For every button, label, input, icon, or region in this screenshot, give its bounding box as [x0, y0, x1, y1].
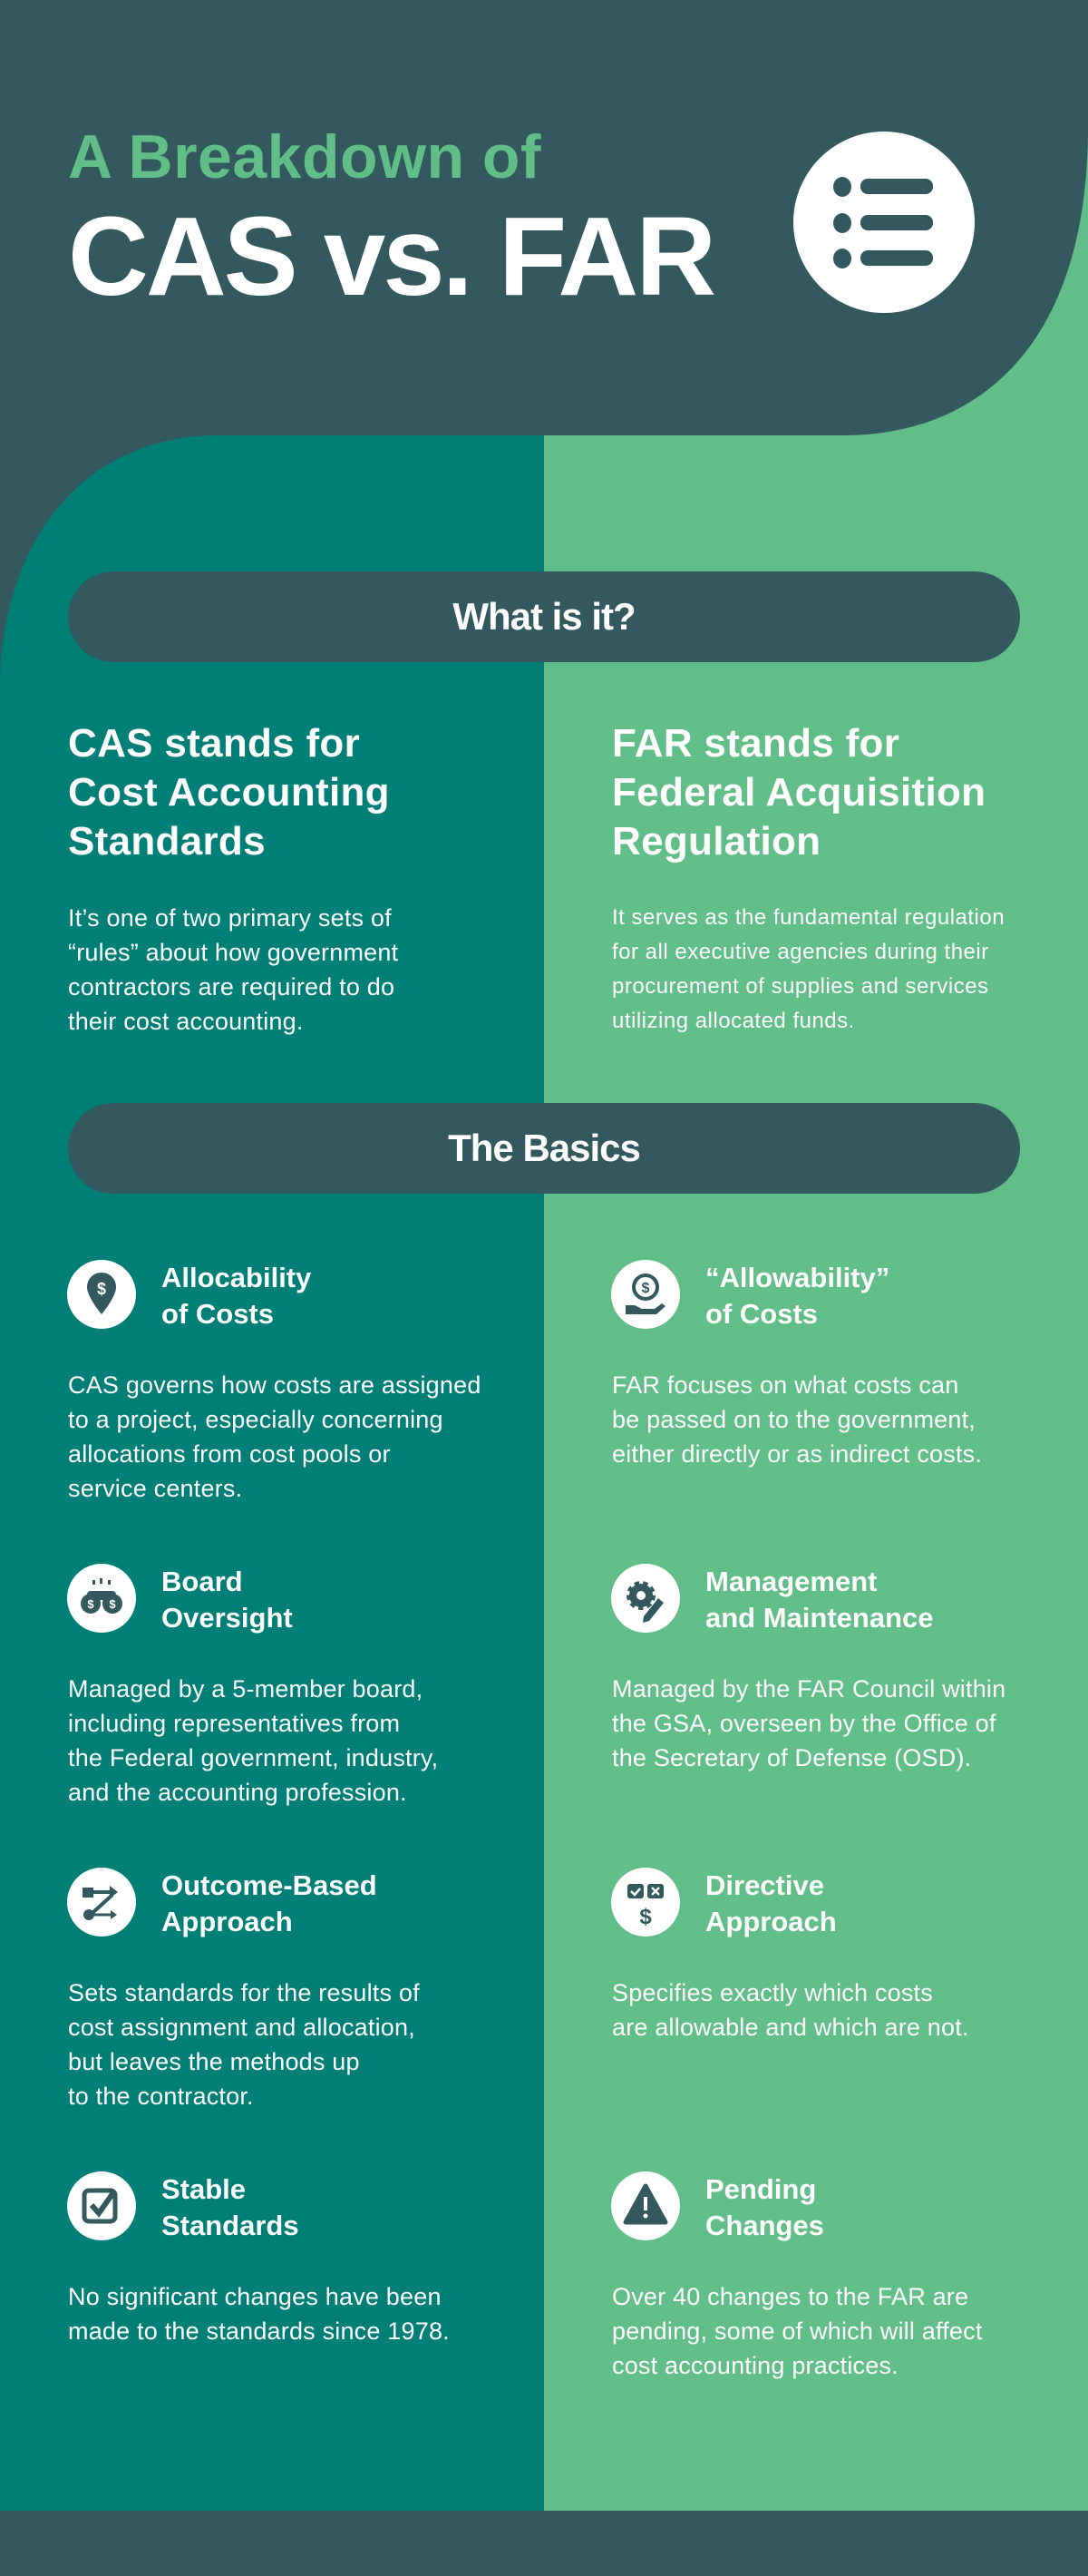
body: pending, some of which will affect [612, 2317, 983, 2345]
heading: Stable [161, 2173, 246, 2205]
heading [705, 1566, 934, 1634]
heading: Approach [161, 1906, 293, 1937]
body: Managed by the FAR Council within [612, 1675, 1005, 1703]
heading [705, 2173, 824, 2241]
body: and the accounting profession. [68, 1779, 407, 1806]
body [68, 2283, 450, 2345]
heading [161, 1566, 293, 1634]
item: Stable Standards [67, 2171, 450, 2345]
pill: The Basics [68, 1103, 1020, 1194]
text: CAS description: It’s one of two primary sets of [68, 904, 392, 932]
icon: binoculars [67, 1564, 136, 1633]
icon: location dollar: $ [97, 1280, 106, 1298]
body: No significant changes have been [68, 2283, 442, 2310]
body: cost assignment and allocation, [68, 2014, 415, 2041]
body: Managed by a 5-member board, [68, 1675, 423, 1703]
heading: of Costs [161, 1298, 274, 1330]
text: FAR description: It serves as the fundamental regulation [612, 905, 1005, 930]
heading [705, 1869, 837, 1937]
footer bar [0, 2511, 1088, 2576]
heading: “Allowability” [705, 1262, 889, 1293]
body: service centers. [68, 1475, 242, 1502]
item: Allowability of Costs [611, 1260, 982, 1468]
heading: Approach [705, 1906, 837, 1937]
item: Directive Approach [611, 1868, 969, 2041]
body: but leaves the methods up [68, 2048, 360, 2075]
icon: check/cross dollar [611, 1868, 680, 1937]
heading: Changes [705, 2210, 824, 2241]
heading [161, 2173, 299, 2241]
icon: binoculars: $ [87, 1597, 94, 1611]
heading [705, 1262, 889, 1330]
title: CAS vs. FAR [68, 195, 714, 319]
item: Board Oversight [67, 1564, 438, 1806]
icon: location dollar [67, 1260, 136, 1329]
body [68, 1371, 481, 1502]
body [612, 1979, 969, 2041]
heading: FAR stands for: FAR stands for [612, 721, 899, 766]
icon: warning [611, 2171, 680, 2240]
text: CAS description [68, 904, 398, 1035]
text: FAR description: procurement of supplies and services [612, 974, 989, 999]
heading: CAS stands for: Cost Accounting [68, 770, 390, 815]
body: CAS governs how costs are assigned [68, 1371, 481, 1399]
body: to a project, especially concerning [68, 1406, 443, 1433]
heading: and Maintenance [705, 1602, 934, 1634]
text: FAR description [612, 905, 1005, 1033]
pill: The Basics: The Basics [448, 1127, 640, 1169]
text: CAS description: “rules” about how government [68, 939, 398, 966]
heading: FAR stands for [612, 721, 986, 864]
heading [161, 1262, 312, 1330]
item: Management and Maintenance [611, 1564, 1005, 1771]
body [68, 1675, 438, 1806]
pill: What is it? [68, 571, 1020, 662]
header shape [0, 0, 1088, 679]
title [68, 122, 714, 319]
heading: of Costs [705, 1298, 818, 1330]
item: Pending Changes [611, 2171, 983, 2379]
icon: hand dollar [611, 1260, 680, 1329]
text: FAR description: utilizing allocated funds. [612, 1009, 855, 1033]
body [68, 1979, 420, 2110]
heading: Oversight [161, 1602, 293, 1634]
heading [161, 1869, 377, 1937]
heading: CAS stands for [68, 721, 390, 864]
heading: Standards [161, 2210, 299, 2241]
heading: CAS stands for: Standards [68, 819, 266, 864]
heading: FAR stands for: Federal Acquisition [612, 770, 986, 815]
body [612, 1675, 1005, 1771]
icon: gear pencil [611, 1564, 680, 1633]
text: FAR description: for all executive agencies during their [612, 940, 989, 964]
heading: FAR stands for: Regulation [612, 819, 821, 864]
item: Allocability of Costs [67, 1260, 481, 1502]
body: to the contractor. [68, 2083, 254, 2110]
body: Sets standards for the results of [68, 1979, 420, 2006]
body: including representatives from [68, 1710, 400, 1737]
body: allocations from cost pools or [68, 1440, 391, 1468]
body: the Federal government, industry, [68, 1744, 438, 1771]
body: either directly or as indirect costs. [612, 1440, 982, 1468]
heading: Allocability [161, 1262, 311, 1293]
title: A Breakdown of [68, 122, 541, 191]
body: made to the standards since 1978. [68, 2317, 450, 2345]
icon: hand dollar: $ [642, 1281, 650, 1296]
body: the GSA, overseen by the Office of [612, 1710, 996, 1737]
item: Outcome-Based Approach [67, 1868, 420, 2110]
body: be passed on to the government, [612, 1406, 976, 1433]
heading: Outcome-Based [161, 1869, 377, 1901]
icon: binoculars: $ [109, 1597, 116, 1611]
body: the Secretary of Defense (OSD). [612, 1744, 971, 1771]
icon: flow arrows [67, 1868, 136, 1937]
body: Specifies exactly which costs [612, 1979, 933, 2006]
icon: check/cross dollar: $ [639, 1905, 652, 1929]
icon: list [793, 132, 975, 313]
body: FAR focuses on what costs can [612, 1371, 958, 1399]
pill: What is it?: What is it? [452, 595, 636, 638]
heading: CAS stands for: CAS stands for [68, 721, 360, 766]
body: are allowable and which are not. [612, 2014, 969, 2041]
text: CAS description: their cost accounting. [68, 1008, 304, 1035]
heading: Management [705, 1566, 877, 1597]
icon: checkbox [67, 2171, 136, 2240]
body [612, 2283, 983, 2379]
heading: Board [161, 1566, 243, 1597]
text: CAS description: contractors are required to do [68, 973, 394, 1000]
body [612, 1371, 982, 1468]
heading: Directive [705, 1869, 824, 1901]
body: cost accounting practices. [612, 2352, 899, 2379]
background: right column [544, 0, 1088, 2576]
body: Over 40 changes to the FAR are [612, 2283, 968, 2310]
heading: Pending [705, 2173, 816, 2205]
